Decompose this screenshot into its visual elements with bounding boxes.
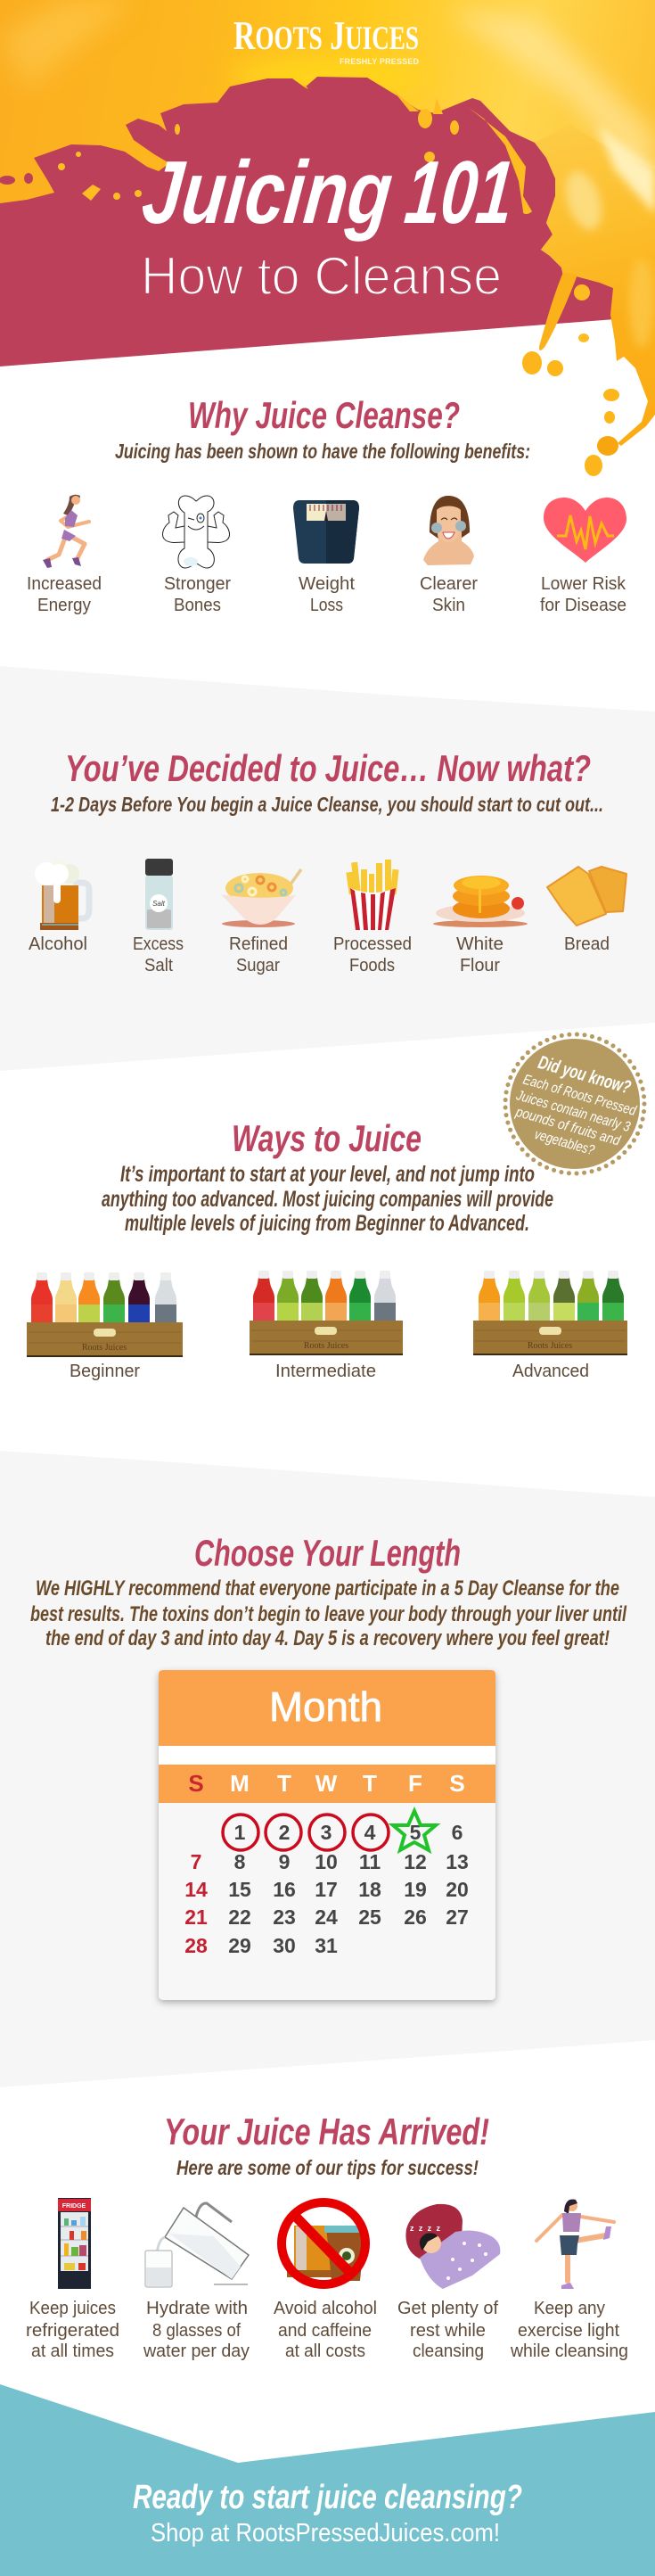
icon: stretching woman: [536, 2200, 614, 2289]
day numbers: [184, 1821, 469, 1957]
badge: did you know: Juices contain nearly 3: [514, 1088, 632, 1135]
day numbers: 7: [191, 1850, 201, 1873]
badge: did you know: [505, 1034, 644, 1173]
day numbers: 14: [184, 1878, 208, 1901]
icon: sleeping person: z z z z: [410, 2224, 440, 2233]
subtitle: How to Cleanse: [141, 246, 502, 306]
labels: benefits: for Disease: [540, 596, 626, 615]
day numbers: 6: [452, 1821, 463, 1844]
labels: tips: Keep any: [534, 2299, 605, 2318]
icon: no alcohol or caffeine: [282, 2202, 365, 2284]
day numbers: 13: [446, 1850, 469, 1873]
day numbers: 23: [273, 1905, 296, 1929]
labels: levels: Beginner: [70, 1362, 140, 1381]
day circles: [223, 1815, 389, 1850]
crate: advanced: Roots Juices: [528, 1341, 572, 1351]
day numbers: 24: [315, 1905, 338, 1929]
day numbers: 15: [228, 1878, 251, 1901]
labels: foods to cut: Salt: [144, 956, 173, 975]
labels: foods to cut: Processed: [333, 934, 412, 954]
logo: ROOTS JUICES: [233, 12, 419, 58]
labels: benefits: Loss: [310, 596, 343, 615]
labels: benefits: Weight: [299, 574, 355, 594]
crate: beginner: [27, 1272, 183, 1357]
day numbers: 17: [315, 1878, 338, 1901]
intro text: [30, 1576, 627, 1650]
day numbers: 11: [359, 1850, 381, 1873]
panel: ways to juice: [27, 1034, 644, 1381]
day 5 star: [393, 1811, 436, 1850]
day numbers: 29: [228, 1934, 251, 1957]
labels: foods to cut: Alcohol: [29, 934, 87, 954]
day numbers: 27: [446, 1905, 469, 1929]
crate: advanced: [473, 1271, 627, 1355]
crate: intermediate: Roots Juices: [304, 1341, 348, 1351]
day numbers: 21: [184, 1905, 208, 1929]
labels: foods to cut: Bread: [564, 934, 610, 954]
labels: foods to cut: Foods: [349, 956, 395, 975]
day numbers: 18: [358, 1878, 381, 1901]
day numbers: 3: [321, 1821, 332, 1844]
day numbers: 19: [404, 1878, 427, 1901]
labels: tips: at all times: [31, 2341, 114, 2361]
labels: foods to cut: Sugar: [236, 956, 280, 975]
crate: beginner: Roots Juices: [82, 1343, 127, 1353]
labels: tips: exercise light: [518, 2321, 619, 2341]
labels: foods to cut: Flour: [460, 956, 500, 975]
weekday row: W: [315, 1770, 338, 1797]
day numbers: 26: [404, 1905, 427, 1929]
labels: tips: while cleansing: [510, 2341, 628, 2361]
day numbers: 8: [234, 1850, 246, 1873]
labels: benefits: Energy: [37, 596, 91, 615]
icon: salt shaker: [145, 859, 173, 930]
day numbers: 4: [364, 1821, 376, 1844]
labels: benefits: Skin: [432, 596, 465, 615]
subheading: Here are some of our tips for success!: [176, 2156, 479, 2179]
juice drops on crimson: [0, 82, 590, 342]
labels: tips: and caffeine: [278, 2321, 372, 2341]
day numbers: 5: [410, 1821, 422, 1844]
panel: now what: [0, 666, 655, 1071]
labels: levels: Intermediate: [275, 1362, 376, 1381]
panel: choose your length: [0, 1451, 655, 2087]
labels: foods to cut: Refined: [229, 934, 288, 954]
heading: Your Juice Has Arrived!: [164, 2111, 489, 2152]
icon: sleeping person: [405, 2204, 500, 2289]
crimson splash field: [0, 77, 615, 366]
badge: did you know: vegetables?: [533, 1127, 596, 1158]
calendar month: Month: [269, 1683, 382, 1730]
weekday row: [188, 1770, 465, 1797]
labels: tips: refrigerated: [26, 2321, 119, 2341]
icon: fridge: FRIDGE: [62, 2203, 86, 2210]
labels: levels: Advanced: [512, 1362, 589, 1381]
crate: intermediate: [250, 1271, 403, 1355]
logo: FRESHLY PRESSED: [340, 57, 419, 66]
icon: french fries: [346, 860, 399, 930]
panel: why juice cleanse: [27, 394, 626, 615]
heading: Choose Your Length: [194, 1532, 461, 1574]
day numbers: 25: [358, 1905, 381, 1929]
day numbers: 22: [228, 1905, 251, 1929]
icon: runner: [43, 495, 89, 568]
icon: toast: [547, 867, 626, 926]
labels: foods to cut: White: [456, 934, 504, 954]
title: 101: [401, 143, 518, 243]
icon: cereal bowl: [221, 869, 301, 927]
icon: beer mug: [35, 859, 89, 930]
panel: footer call to action: [0, 2384, 655, 2576]
badge: did you know: pounds of fruits and: [513, 1105, 623, 1149]
weekday row: F: [408, 1770, 422, 1797]
intro text: [102, 1162, 553, 1236]
weekday row: T: [277, 1770, 291, 1797]
icon: salt shaker: Salt: [152, 900, 166, 908]
weekday row: S: [449, 1770, 465, 1797]
day numbers: 2: [279, 1821, 290, 1844]
day numbers: 1: [234, 1821, 246, 1844]
labels: benefits: [27, 574, 626, 615]
labels: benefits: Lower Risk: [541, 574, 626, 594]
icon: weight scale: [293, 500, 359, 564]
icon: water pitcher: [145, 2203, 249, 2287]
panel: your juice has arrived: [26, 2111, 628, 2361]
calendar: [159, 1670, 495, 2000]
labels: foods to cut: [29, 934, 610, 975]
heading: Why Juice Cleanse?: [188, 394, 460, 436]
labels: benefits: Increased: [27, 574, 102, 594]
day numbers: 31: [315, 1934, 338, 1957]
day numbers: 28: [184, 1934, 208, 1957]
subheading: Juicing has been shown to have the following benefits:: [115, 440, 530, 463]
icon: heart with pulse: [544, 498, 626, 563]
labels: benefits: Clearer: [420, 574, 478, 594]
labels: levels: [70, 1362, 589, 1381]
labels: benefits: Bones: [174, 596, 221, 615]
weekday row: S: [188, 1770, 204, 1797]
shop link text: Shop at RootsPressedJuices.com!: [151, 2519, 500, 2547]
labels: tips: [26, 2299, 628, 2361]
labels: benefits: Stronger: [164, 574, 231, 594]
call to action heading: Ready to start juice cleansing?: [133, 2479, 522, 2516]
labels: tips: 8 glasses of: [152, 2321, 241, 2341]
labels: tips: cleansing: [413, 2341, 484, 2361]
labels: foods to cut: Excess: [133, 934, 184, 954]
labels: tips: Get plenty of: [397, 2299, 498, 2318]
icon: pancakes: [433, 876, 528, 927]
labels: tips: Keep juices: [29, 2299, 116, 2318]
weekday row: M: [230, 1770, 250, 1797]
title: Juicing: [138, 143, 397, 243]
icon: clear skin: [423, 496, 474, 565]
labels: tips: water per day: [143, 2341, 250, 2361]
day numbers: 12: [404, 1850, 427, 1873]
day numbers: 30: [273, 1934, 296, 1957]
labels: tips: at all costs: [285, 2341, 365, 2361]
right splash stream: [535, 125, 655, 446]
panel: hero header: [0, 0, 655, 476]
heading: Ways to Juice: [232, 1117, 422, 1159]
day numbers: 16: [273, 1878, 296, 1901]
weekday row: T: [363, 1770, 377, 1797]
icon: fridge: [58, 2198, 91, 2289]
day numbers: 20: [446, 1878, 469, 1901]
day numbers: 10: [315, 1850, 338, 1873]
labels: tips: rest while: [410, 2321, 486, 2341]
day numbers: 9: [279, 1850, 290, 1873]
labels: tips: Avoid alcohol: [274, 2299, 377, 2318]
icon: bone: [163, 496, 229, 568]
labels: tips: Hydrate with: [146, 2299, 248, 2318]
